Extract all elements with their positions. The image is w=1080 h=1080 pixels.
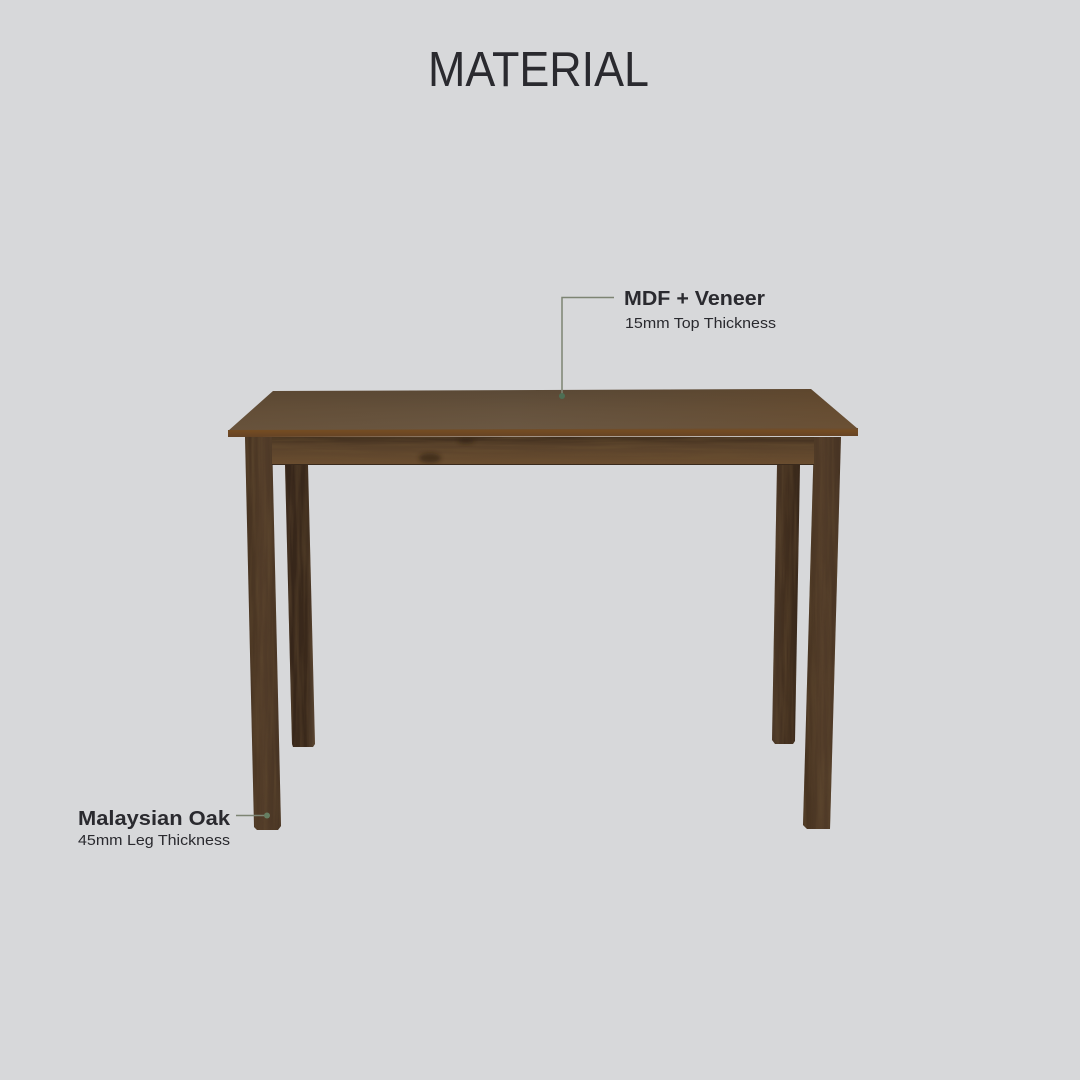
callout heading: MDF + Veneer — [624, 288, 765, 310]
table top surface — [228, 389, 858, 431]
front right leg — [803, 437, 841, 829]
title: MATERIAL — [428, 43, 649, 97]
apron shadow line — [272, 464, 814, 465]
callout: Malaysian Oak — [78, 808, 270, 849]
leader line — [236, 814, 267, 816]
back right leg — [772, 465, 800, 744]
table illustration — [228, 389, 858, 832]
leg wood grain — [240, 437, 850, 832]
back left leg — [285, 465, 315, 747]
callout: MDF + Veneer — [559, 288, 776, 399]
leader dot — [264, 812, 270, 818]
callout heading: Malaysian Oak — [78, 808, 231, 830]
callout detail: 15mm Top Thickness — [625, 315, 776, 332]
apron wood grain — [272, 437, 814, 465]
apron — [272, 437, 814, 465]
table top front edge — [228, 428, 858, 437]
leader line — [562, 298, 614, 396]
callout detail: 45mm Leg Thickness — [78, 832, 230, 849]
front left leg — [245, 437, 281, 830]
leader dot — [559, 393, 565, 399]
